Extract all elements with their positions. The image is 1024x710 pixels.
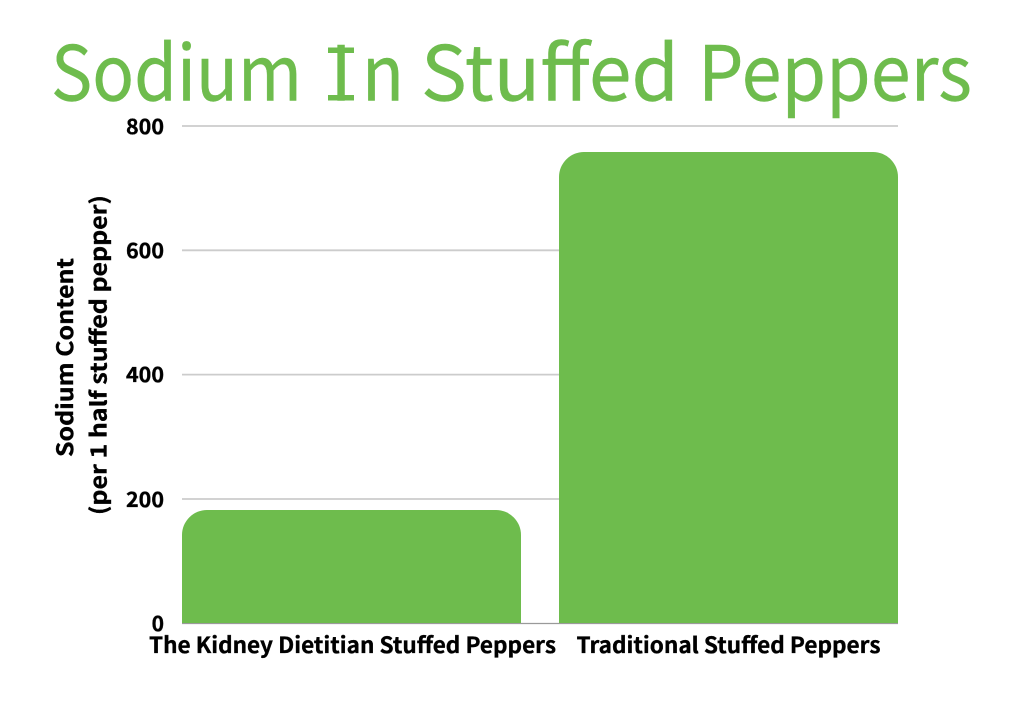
x axis baseline (182, 622, 898, 624)
y axis tick labels: 600 (126, 235, 164, 265)
bar: The Kidney Dietitian Stuffed Peppers (182, 510, 521, 623)
title: Peppers (698, 12, 972, 122)
title: n (362, 12, 404, 122)
x axis category labels: The Kidney Dietitian Stuffed Peppers (149, 628, 556, 660)
y axis tick labels: 400 (126, 359, 164, 389)
title: Sodium (51, 12, 302, 122)
y axis title: Sodium Content (48, 258, 80, 457)
title (51, 12, 972, 122)
y axis tick labels: 0 (152, 608, 164, 638)
bar: Traditional Stuffed Peppers (559, 152, 898, 623)
title: I (330, 12, 352, 122)
y axis tick labels: 800 (126, 111, 164, 141)
y axis title: (per 1 half stuffed pepper) (82, 195, 114, 515)
y axis title (48, 195, 114, 515)
y axis tick labels (126, 111, 164, 638)
y axis tick labels: 200 (126, 484, 164, 514)
x axis category labels (149, 628, 881, 660)
title: Stuffed (421, 12, 679, 122)
x axis category labels: Traditional Stuffed Peppers (576, 628, 881, 660)
